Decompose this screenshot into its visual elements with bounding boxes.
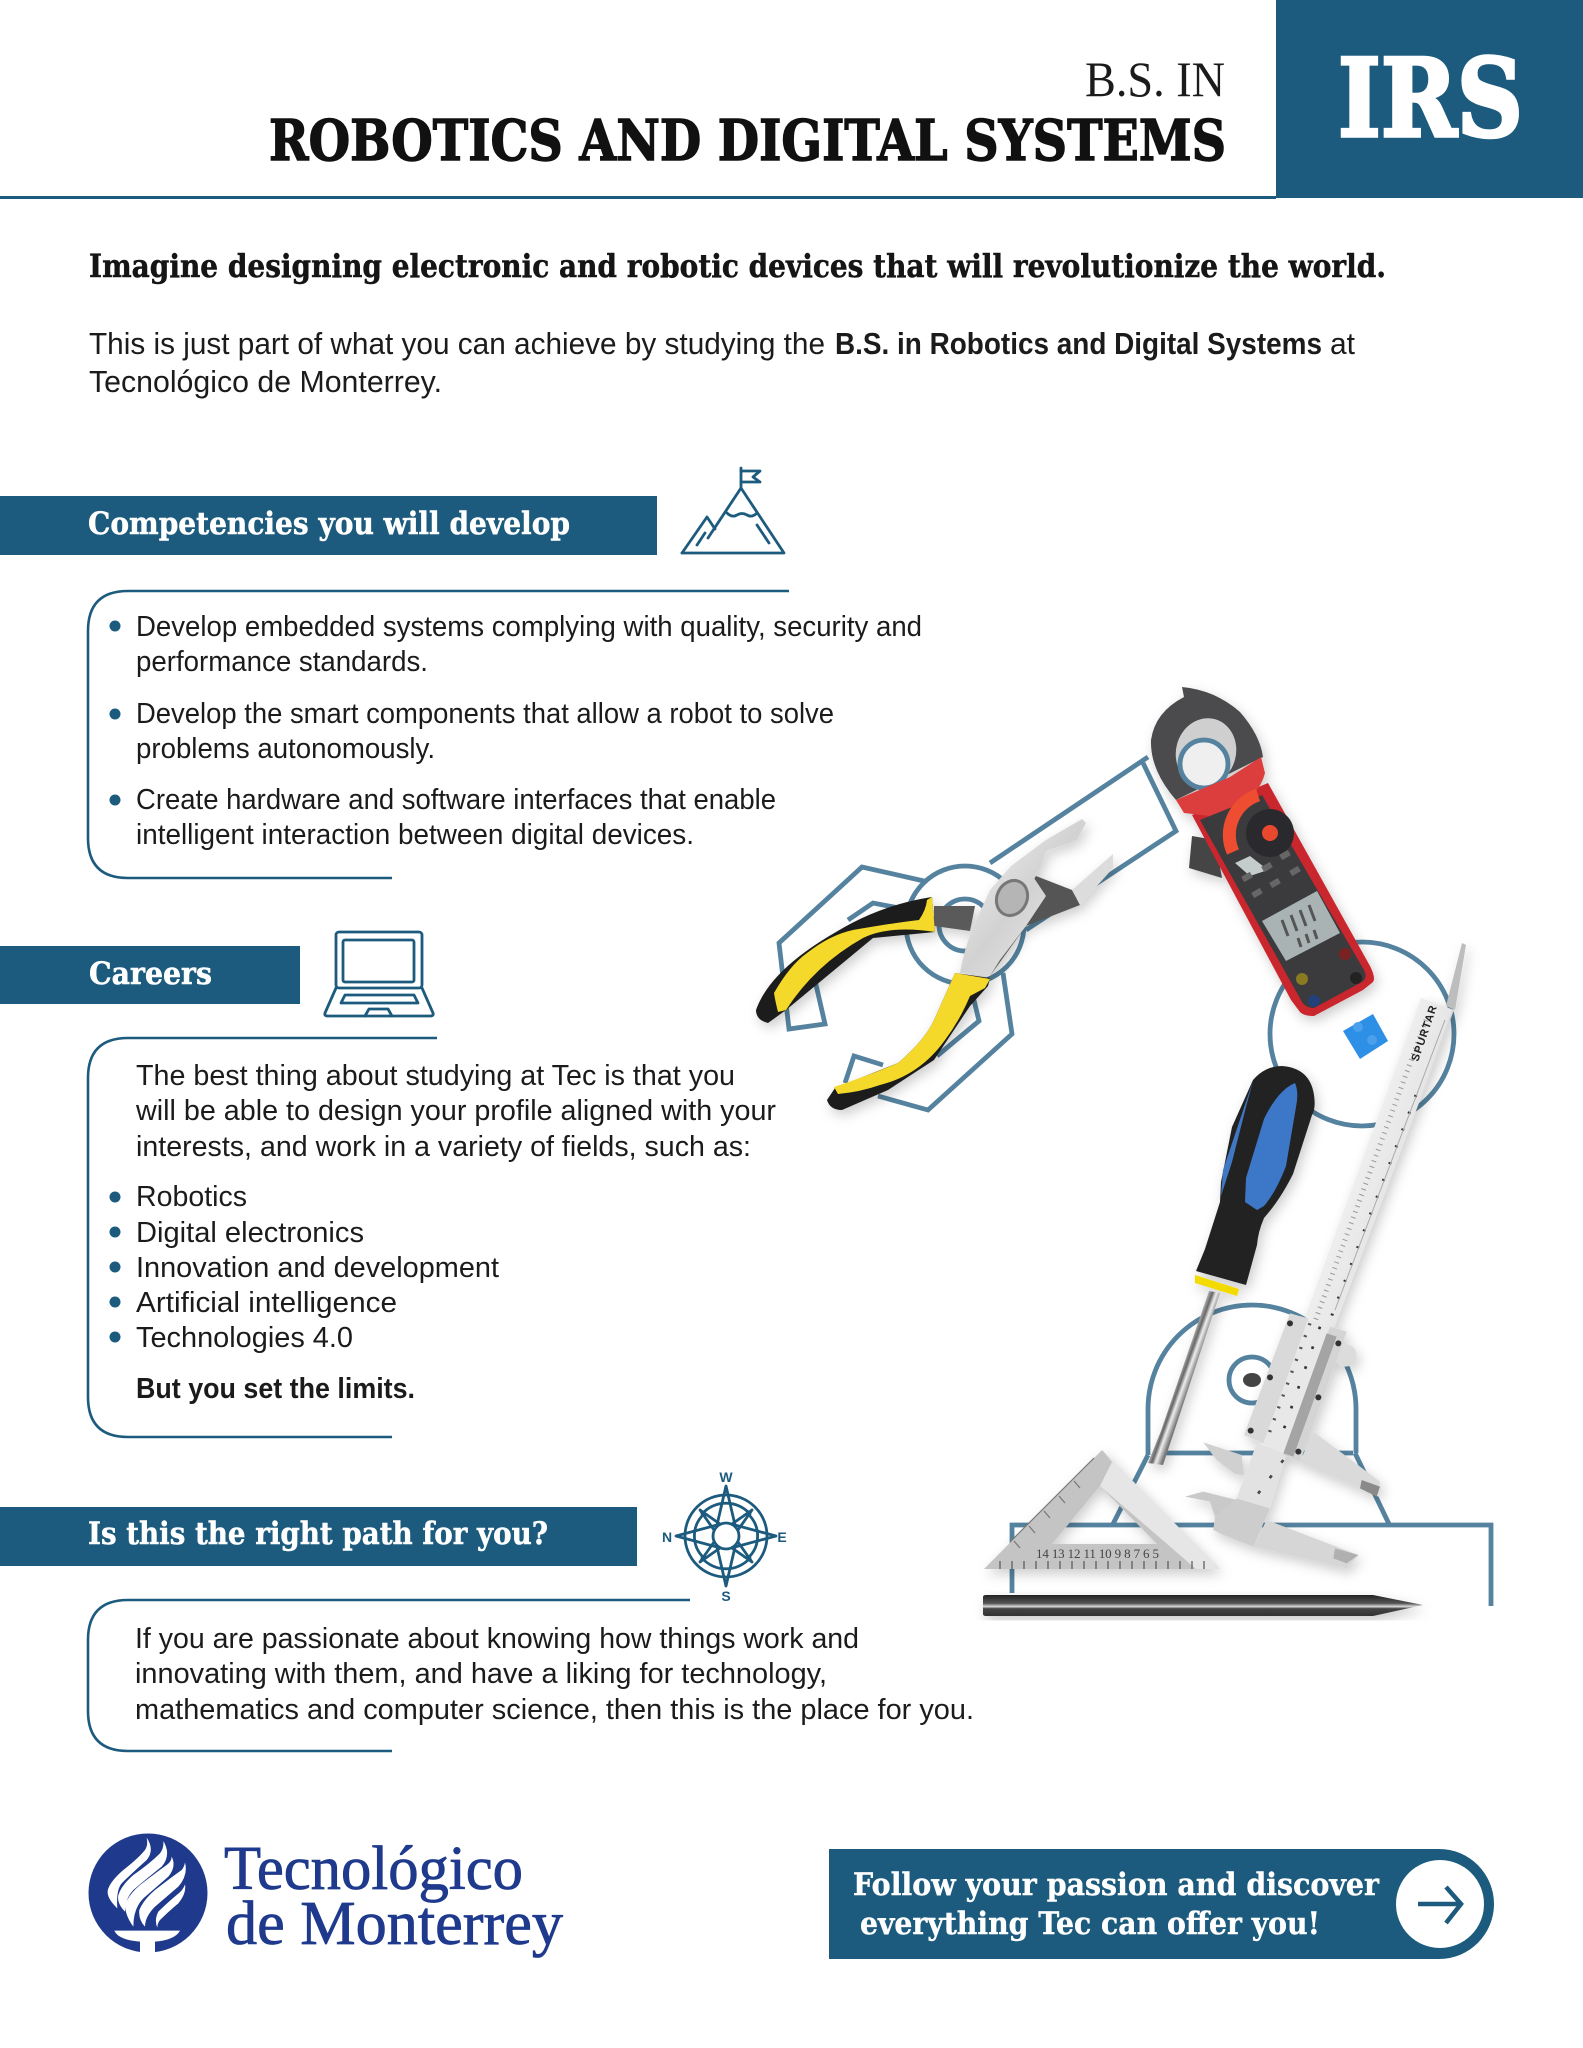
icon: arrow in circle bbox=[1396, 1860, 1484, 1948]
subtitle: B.S. IN bbox=[1085, 51, 1225, 107]
section bar: competencies: Competencies you will develop bbox=[88, 506, 570, 542]
panel: careers: Robotics bbox=[136, 1181, 247, 1213]
panel: careers: Digital electronics bbox=[136, 1217, 364, 1249]
icon: compass: E bbox=[777, 1529, 787, 1545]
intro text: Tecnológico de Monterrey. bbox=[89, 364, 442, 399]
panel: careers: interests, and work in a variety of fields, such as: bbox=[136, 1131, 751, 1163]
logo wordmark: de Monterrey bbox=[226, 1890, 563, 1958]
panel: careers: But you set the limits. bbox=[136, 1373, 415, 1405]
panel: right path: innovating with them, and have a liking for technology, bbox=[135, 1658, 827, 1690]
logo emblem bbox=[88, 1834, 208, 1954]
intro text bbox=[89, 326, 1355, 399]
panel: competencies: intelligent interaction between digital devices. bbox=[136, 819, 694, 851]
section bar: careers: Careers bbox=[89, 956, 212, 992]
title: ROBOTICS AND DIGITAL SYSTEMS bbox=[269, 108, 1226, 174]
intro text: at bbox=[1330, 326, 1355, 361]
section bar: careers bbox=[0, 946, 300, 1004]
badge: IRS bbox=[1276, 0, 1583, 198]
panel: competencies: Develop embedded systems complying with quality, security and bbox=[136, 611, 922, 643]
icon: laptop bbox=[325, 932, 433, 1016]
header rule bbox=[0, 196, 1276, 199]
section bar: right path: Is this the right path for you? bbox=[88, 1516, 548, 1552]
panel: careers bbox=[88, 1038, 776, 1437]
icon: compass bbox=[662, 1469, 787, 1604]
header bbox=[0, 0, 1583, 199]
intro heading: Imagine designing electronic and robotic devices that will revolutionize the world. bbox=[89, 247, 1386, 285]
panel: competencies bbox=[88, 591, 922, 878]
vernier caliper: SPURTAR bbox=[1409, 1004, 1440, 1063]
call to action: Follow your passion and discover bbox=[853, 1867, 1380, 1903]
panel: competencies: Develop the smart components that allow a robot to solve bbox=[136, 698, 834, 730]
logo wordmark bbox=[224, 1835, 563, 1958]
panel: careers: Innovation and development bbox=[136, 1252, 499, 1284]
panel: careers: Artificial intelligence bbox=[136, 1287, 397, 1319]
blueprint robot outline bbox=[779, 757, 1491, 1606]
panel: competencies: problems autonomously. bbox=[136, 733, 435, 765]
icon: compass: S bbox=[721, 1588, 731, 1604]
intro text: B.S. in Robotics and Digital Systems bbox=[835, 326, 1322, 361]
logo wordmark: Tecnológico bbox=[224, 1835, 523, 1903]
panel: careers: The best thing about studying at Tec is that you bbox=[136, 1060, 735, 1092]
panel: careers: will be able to design your profile aligned with your bbox=[135, 1095, 776, 1127]
vernier caliper bbox=[1185, 943, 1466, 1568]
small screw bbox=[1243, 1373, 1261, 1387]
set square bbox=[984, 1450, 1220, 1569]
call to action: everything Tec can offer you! bbox=[860, 1906, 1320, 1942]
clamp meter bbox=[1151, 687, 1374, 1016]
intro text: This is just part of what you can achieve by studying the bbox=[89, 326, 825, 361]
panel: right path bbox=[88, 1600, 974, 1751]
panel: right path: mathematics and computer science, then this is the place for you. bbox=[135, 1694, 974, 1726]
icon: compass: N bbox=[662, 1529, 672, 1545]
section bar: right path bbox=[0, 1507, 637, 1566]
panel: careers: Technologies 4.0 bbox=[136, 1322, 353, 1354]
panel: competencies: Create hardware and software interfaces that enable bbox=[136, 784, 776, 816]
screwdriver bbox=[1148, 1066, 1315, 1465]
badge: IRS: IRS bbox=[1338, 36, 1523, 162]
panel: competencies: performance standards. bbox=[136, 646, 428, 678]
robot arm illustration bbox=[756, 687, 1491, 1616]
icon: compass: W bbox=[719, 1469, 733, 1485]
call to action bbox=[829, 1849, 1494, 1959]
section bar: competencies bbox=[0, 496, 657, 555]
pliers bbox=[756, 819, 1113, 1110]
panel: right path: If you are passionate about knowing how things work and bbox=[135, 1623, 859, 1655]
logo: Tecnológico de Monterrey bbox=[88, 1834, 563, 1958]
set square: 14 13 12 11 10 9 8 7 6 5 bbox=[1036, 1546, 1159, 1561]
icon: mountain with flag bbox=[682, 468, 784, 553]
cube bbox=[1343, 1014, 1388, 1059]
pencil bbox=[983, 1595, 1423, 1616]
